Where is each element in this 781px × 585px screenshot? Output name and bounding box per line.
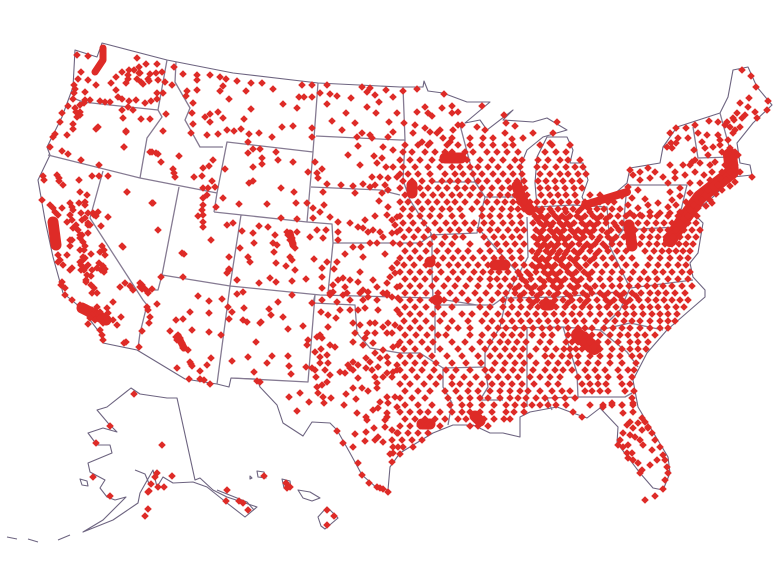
location markers: Alaska and Hawaii [93,394,334,525]
location markers: Florida [573,403,668,500]
location markers: central and eastern states [390,212,700,454]
location markers: Northern Plains [310,85,397,297]
Hawaii outline [250,471,338,529]
state borders [48,60,733,425]
location markers: Upper Midwest [400,89,620,209]
location markers: Texas and Oklahoma [289,292,398,492]
location markers: Mountain states [97,67,322,384]
dense metro clusters [53,48,732,424]
location markers: New England and New York [622,70,768,215]
contiguous states outline [38,43,772,490]
Alaska outline [7,388,257,542]
location markers: Pacific states [42,55,172,347]
